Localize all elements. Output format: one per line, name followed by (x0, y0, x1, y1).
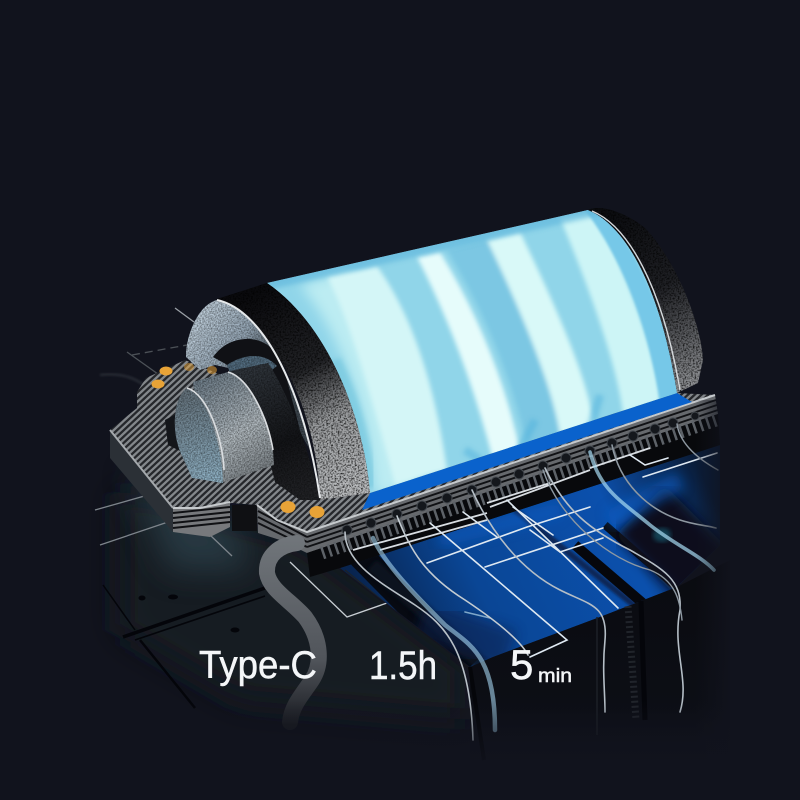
disc face (186, 300, 310, 450)
label: 5 min: 5 (510, 641, 533, 688)
cylinder right end band (588, 208, 703, 393)
connector holes on board edge (342, 412, 699, 535)
blue-gray bearing (227, 356, 277, 378)
middle dark band (230, 363, 320, 500)
Type-C cable (267, 543, 319, 722)
motor housing: large ring (186, 283, 370, 500)
rim highlight (217, 300, 320, 498)
label: 5 min: min (538, 666, 572, 687)
blue glow strip under the cylinder (362, 393, 692, 510)
battery cylinder (267, 205, 680, 495)
board: comb connector strip (307, 414, 720, 577)
board: front edge layers and notch (110, 395, 718, 553)
thin wires (345, 424, 718, 740)
orange contact dots (152, 363, 324, 518)
label: 5 min (510, 641, 572, 688)
blue lit block tops (340, 445, 720, 668)
label: 1.5h: 1.5h (369, 644, 437, 688)
infographic illustration (94, 208, 720, 744)
floor panel with circuit grooves (95, 308, 465, 720)
black block front faces (470, 560, 730, 770)
label: Type-C: Type-C (199, 644, 317, 687)
circuit trace lines (427, 453, 717, 657)
board: striped top surface (110, 360, 715, 532)
right side fade (695, 400, 735, 770)
motor housing: small drum (165, 372, 274, 484)
right end rim line (592, 211, 680, 390)
dark arch behind disc (213, 339, 300, 430)
bottom fade (100, 700, 740, 775)
left glow on cylinder (300, 270, 415, 495)
pale bands on cylinder (327, 212, 660, 485)
